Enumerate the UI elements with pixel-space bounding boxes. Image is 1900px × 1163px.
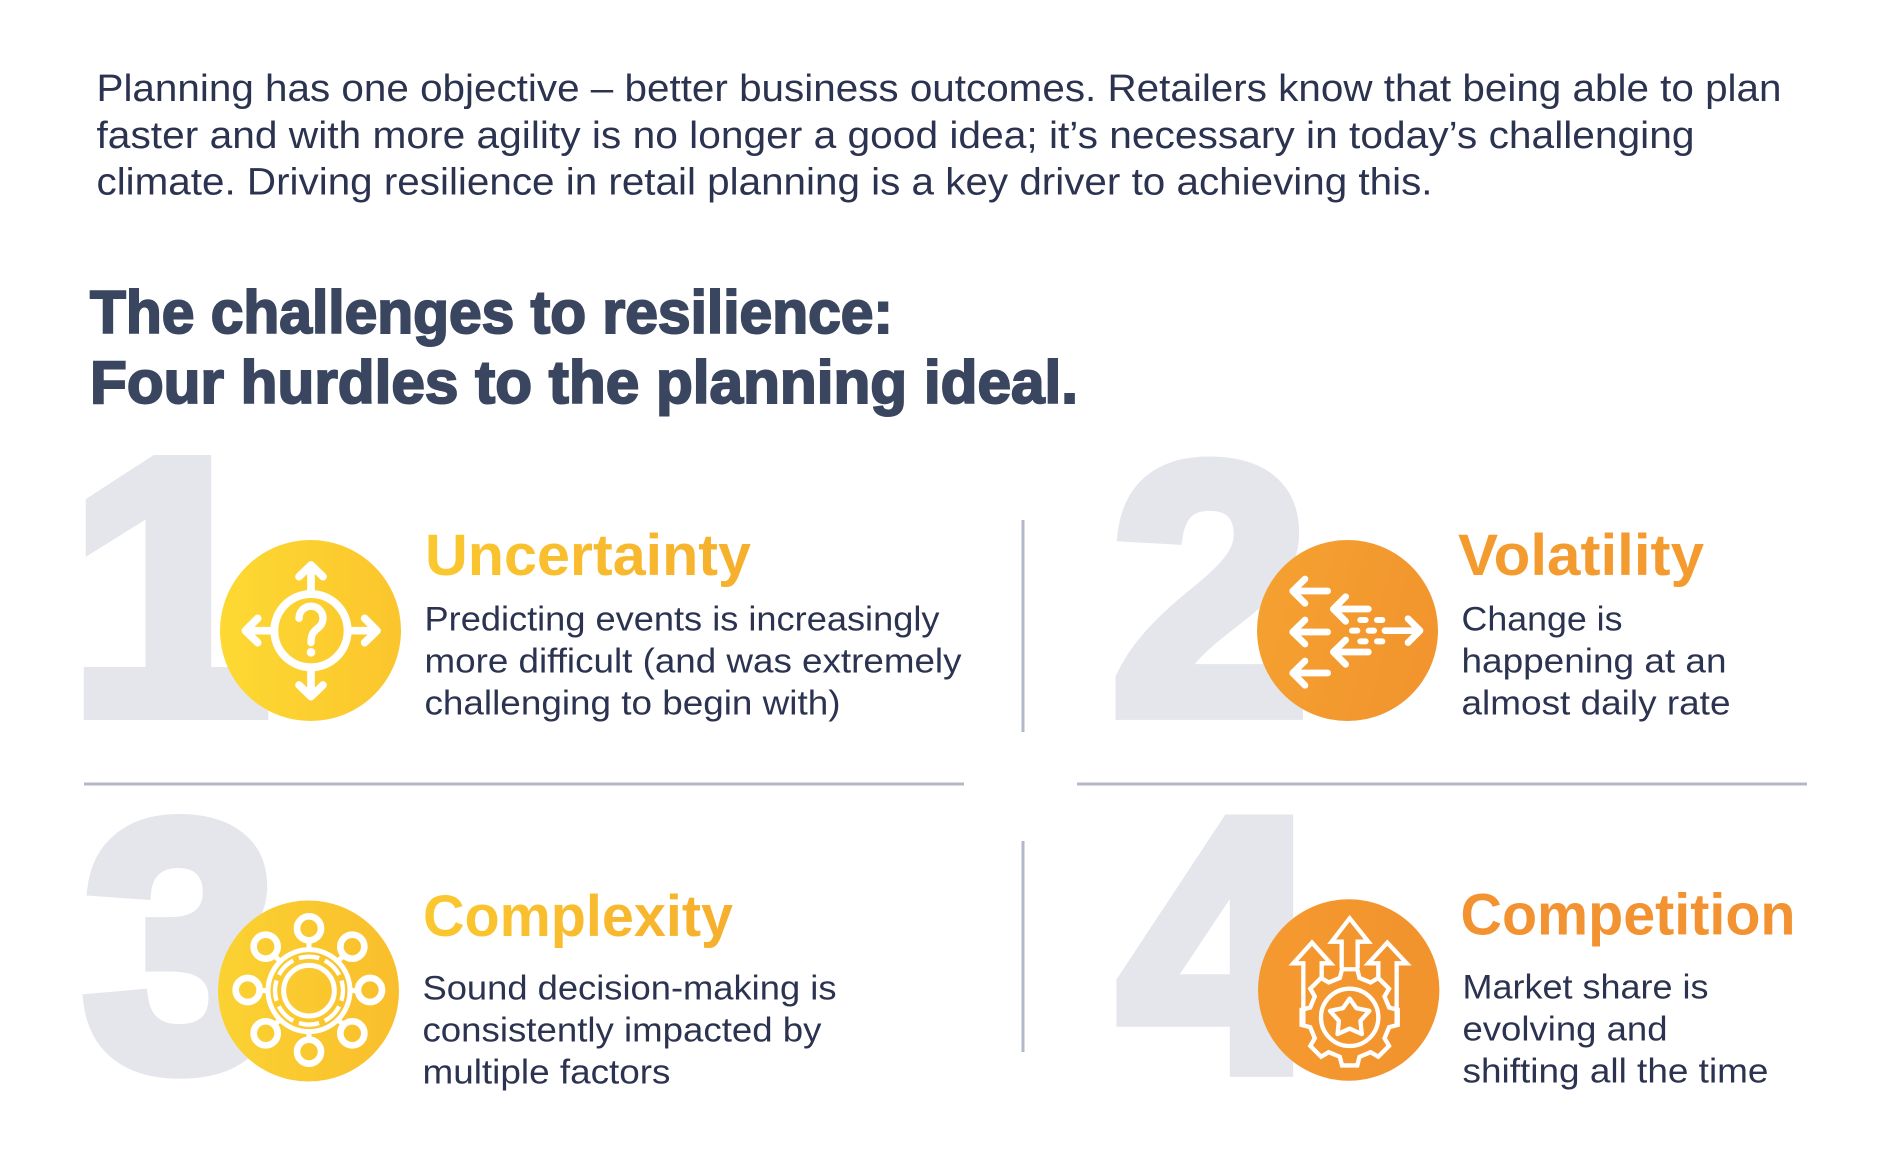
big number 2: 2 xyxy=(1111,392,1309,788)
title: Complexity: Complexity xyxy=(423,884,733,949)
description: Uncertainty: more difficult (and was extremely xyxy=(424,642,962,680)
description: Volatility: Change is xyxy=(1462,600,1622,638)
panel: 1 uncertainty xyxy=(69,384,962,789)
title: Competition: Competition xyxy=(1460,882,1796,948)
main heading: The challenges to resilience: xyxy=(90,279,893,346)
description: Competition: shifting all the time xyxy=(1462,1052,1768,1090)
intro text block: climate. Driving resilience in retail planning is a key driver to achieving this. xyxy=(96,162,1432,204)
main heading: Four hurdles to the planning ideal. xyxy=(90,349,1078,416)
description: Competition: Market share is xyxy=(1462,968,1708,1006)
description: Competition: evolving and xyxy=(1462,1010,1668,1048)
description: Volatility: happening at an xyxy=(1462,642,1726,680)
title: Uncertainty: Uncertainty xyxy=(425,523,751,588)
intro text block: Planning has one objective – better business outcomes. Retailers know that being able to plan xyxy=(96,68,1782,110)
intro text block: faster and with more agility is no longer a good idea; it’s necessary in today’s challenging xyxy=(96,115,1694,157)
icon: hub with eight nodes xyxy=(218,900,399,1082)
main heading xyxy=(90,279,1078,416)
icon: gear with three up arrows xyxy=(1258,899,1439,1081)
description: Volatility xyxy=(1462,600,1730,722)
panel: 4 competition xyxy=(1119,746,1796,1146)
big number 1: 1 xyxy=(69,384,270,789)
title: Volatility: Volatility xyxy=(1458,523,1704,588)
icon: question mark with four arrows xyxy=(220,540,401,721)
description: Uncertainty: challenging to begin with) xyxy=(424,684,840,722)
description: Uncertainty: Predicting events is increasingly xyxy=(424,600,940,638)
description: Volatility: almost daily rate xyxy=(1462,684,1730,722)
description: Uncertainty xyxy=(424,600,962,722)
intro text block xyxy=(96,68,1782,204)
description: Competition xyxy=(1462,968,1768,1090)
description: Complexity xyxy=(422,970,836,1092)
panel: 3 complexity xyxy=(83,750,836,1142)
icon: diverging arrows xyxy=(1257,540,1438,721)
big number 3: 3 xyxy=(83,750,278,1142)
description: Complexity: Sound decision-making is xyxy=(422,970,836,1008)
description: Complexity: multiple factors xyxy=(422,1054,670,1092)
panel: 2 volatility xyxy=(1111,392,1730,788)
description: Complexity: consistently impacted by xyxy=(422,1012,822,1050)
big number 4: 4 xyxy=(1119,746,1323,1146)
